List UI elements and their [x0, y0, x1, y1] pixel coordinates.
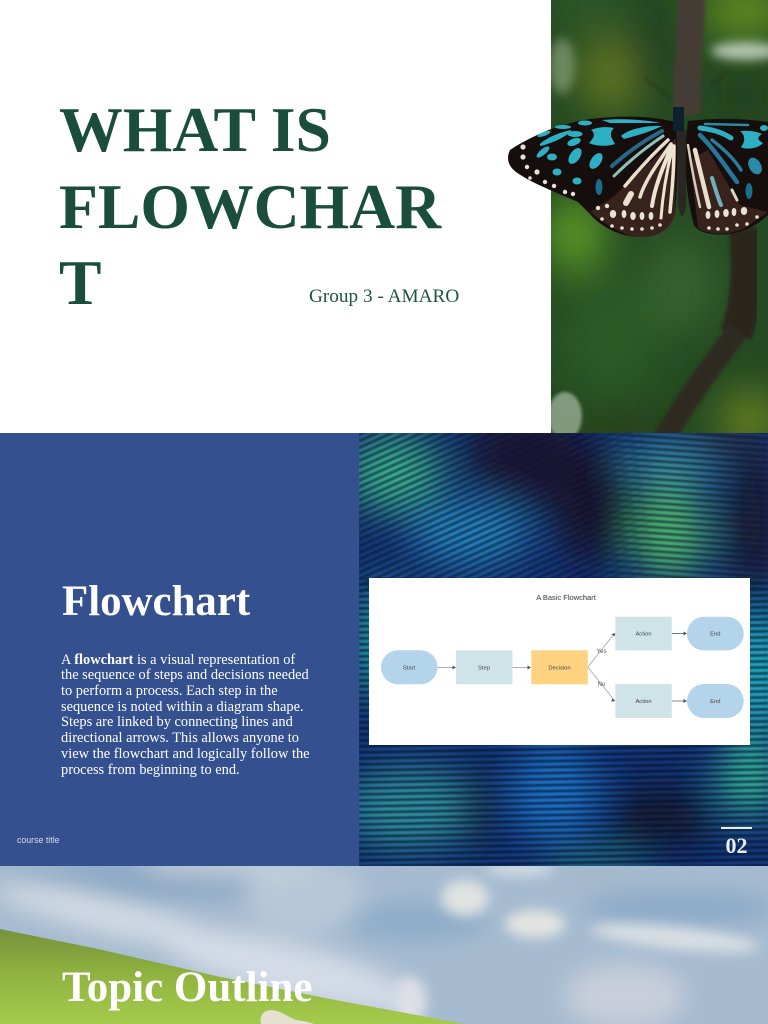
- node: action yes: [615, 617, 672, 650]
- sheep: [261, 1010, 314, 1024]
- heading: what is flowchart: FLOWCHAR: [59, 170, 441, 242]
- panel: topic outline slide: [0, 866, 768, 1024]
- page number: 02: 02: [726, 833, 748, 858]
- text block: flowchart definition: sequence is noted within a diagram shape.: [61, 699, 304, 715]
- node: end yes: End: [710, 632, 720, 638]
- subtitle: group name: Group 3 - AMARO: [309, 286, 459, 307]
- node: step: Step: [478, 666, 490, 672]
- text block: flowchart definition: to perform a process. Each step in the: [61, 683, 278, 699]
- photo: sky, hill and sheep: [0, 866, 768, 1024]
- right forewing spots: [740, 125, 768, 199]
- page number: 02: [721, 827, 752, 859]
- white margin dots: [520, 144, 759, 231]
- node: action no: [615, 684, 672, 718]
- text block: flowchart definition: view the flowchart and logically follow the: [61, 746, 310, 762]
- node: end no: [687, 684, 744, 718]
- text block: flowchart definition: process from beginning to end.: [61, 762, 240, 778]
- wing spots: left forewing: [535, 119, 662, 195]
- text block: flowchart definition: A flowchart is a visual representation of: [61, 652, 295, 668]
- heading: flowchart: Flowchart: [62, 578, 250, 625]
- text block: flowchart definition: [61, 652, 310, 778]
- node: start: Start: [403, 666, 416, 672]
- connectors and arrows: [437, 634, 684, 701]
- panel: flowchart definition slide: [0, 433, 768, 866]
- heading: what is flowchart: WHAT IS: [59, 94, 331, 165]
- node: end yes: [687, 617, 744, 650]
- footer: course title: course title: [17, 835, 60, 845]
- text block: flowchart definition: directional arrows. This allows anyone to: [61, 730, 299, 746]
- panel: title slide: [0, 0, 768, 433]
- node: step: [456, 650, 512, 684]
- node: action yes: Action: [635, 632, 652, 638]
- branch: [645, 0, 747, 445]
- heading: what is flowchart: [59, 94, 442, 318]
- text block: flowchart definition: Steps are linked by connecting lines and: [61, 714, 293, 730]
- photo: peacock feather: [359, 433, 768, 866]
- node: action no: Action: [635, 699, 652, 705]
- label: no: No: [598, 681, 606, 688]
- butterfly: [508, 107, 768, 237]
- photo: butterfly on a branch: [508, 0, 768, 433]
- node: end no: End: [710, 699, 720, 705]
- text block: flowchart definition: the sequence of steps and decisions needed: [61, 667, 309, 683]
- chart: a basic flowchart diagram: [369, 578, 750, 745]
- heading: what is flowchart: T: [59, 247, 101, 318]
- node: start: [381, 650, 438, 684]
- node: decision: Decision: [548, 666, 571, 672]
- diagram title: A Basic Flowchart: [536, 593, 597, 602]
- hill: [0, 929, 465, 1024]
- node: decision: [531, 650, 588, 684]
- heading: topic outline: Topic Outline: [62, 964, 313, 1011]
- label: yes: Yes: [596, 648, 607, 655]
- wing spots: inner streaks: [612, 124, 748, 218]
